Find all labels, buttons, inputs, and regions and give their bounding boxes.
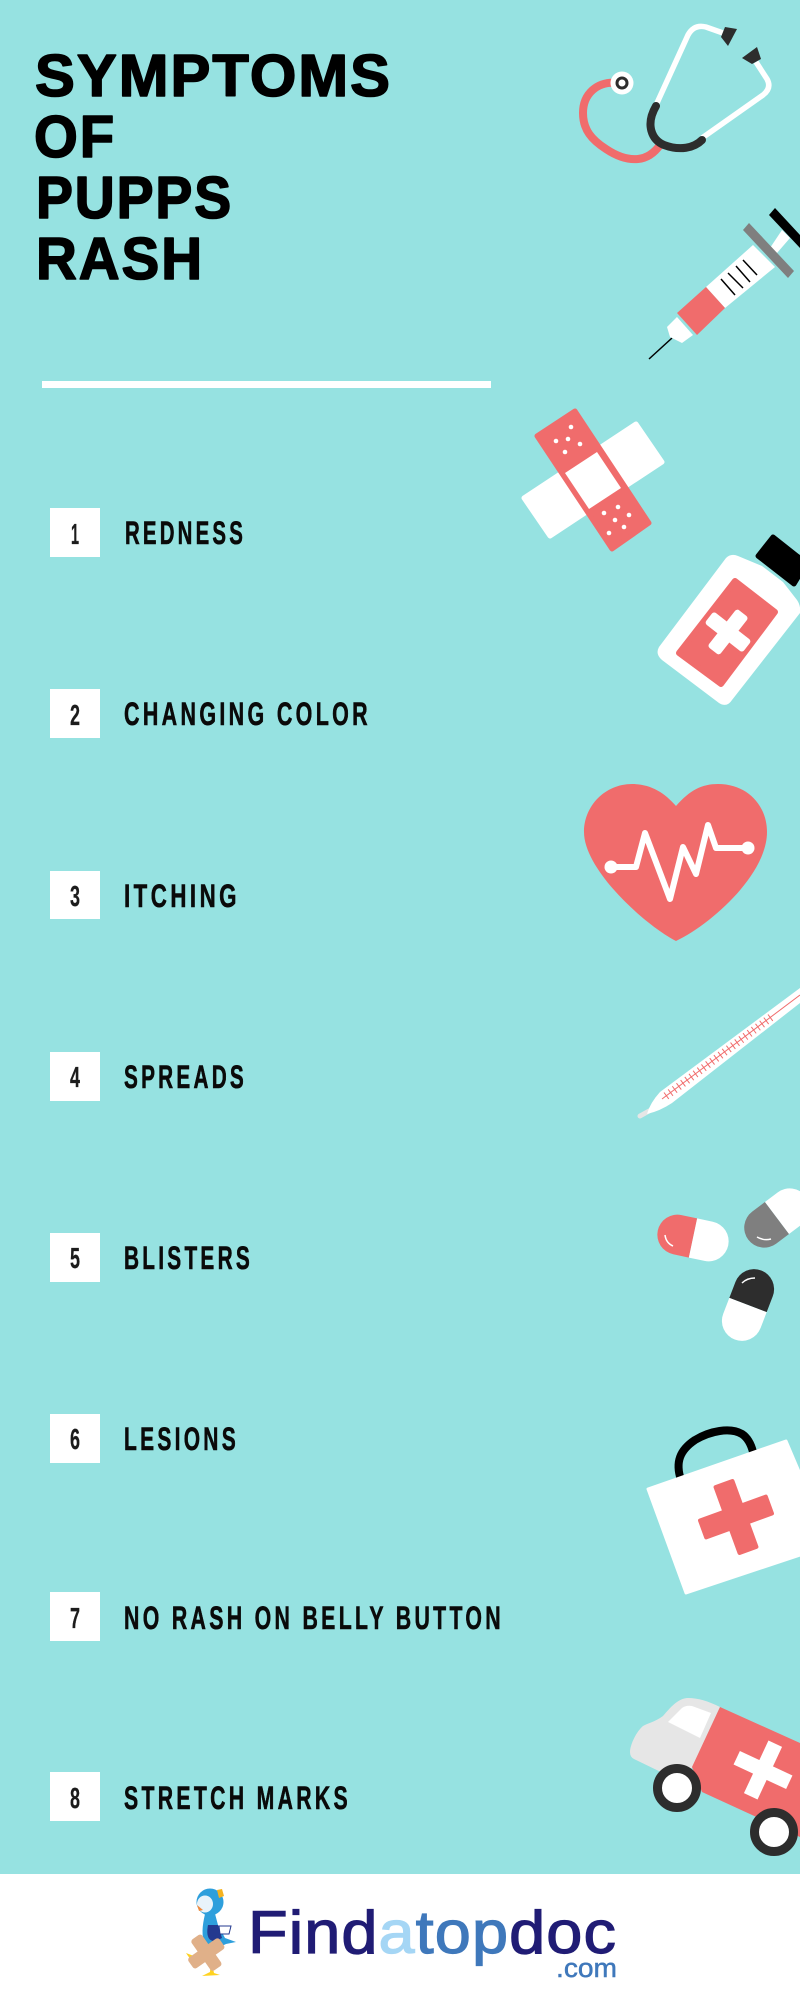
list item 6: lesions xyxy=(50,1414,239,1463)
list item 8: stretch marks: STRETCH MARKS xyxy=(124,1780,351,1816)
icon: pills xyxy=(654,1180,800,1347)
title: SYMPTOMS xyxy=(35,43,392,109)
list item 8: stretch marks: 8 xyxy=(70,1783,80,1815)
list item 7: no rash on belly button: NO RASH ON BELLY BUTTON xyxy=(124,1600,504,1636)
list item 4: spreads xyxy=(50,1052,247,1101)
list item 4: spreads: 4 xyxy=(70,1062,80,1094)
list item 7: no rash on belly button: 7 xyxy=(70,1603,80,1635)
icon: heart with pulse xyxy=(584,784,767,941)
footer band xyxy=(0,1874,800,2000)
list item 5: blisters: 5 xyxy=(70,1243,80,1275)
list item 3: itching xyxy=(50,871,240,919)
title: RASH xyxy=(36,226,204,292)
list item 8: stretch marks xyxy=(50,1772,351,1821)
icon: bandage xyxy=(524,411,662,549)
list item 2: changing color: CHANGING COLOR xyxy=(124,696,371,732)
list item 3: itching: ITCHING xyxy=(124,878,240,914)
logo: Findatopdoc.com wordmark: Findatopdoc xyxy=(248,1899,617,1966)
list item 5: blisters: BLISTERS xyxy=(124,1240,253,1276)
icon: stethoscope xyxy=(583,26,769,159)
title xyxy=(34,43,392,292)
icon: ambulance xyxy=(630,1698,800,1852)
list item 3: itching: 3 xyxy=(70,881,80,913)
logo: duck mascot xyxy=(180,1888,236,1979)
list item 1: redness xyxy=(50,508,246,557)
title: OF xyxy=(34,104,116,170)
list item 5: blisters xyxy=(50,1233,253,1282)
list item 1: redness: 1 xyxy=(71,519,79,551)
list item 2: changing color xyxy=(50,689,371,738)
list item 6: lesions: 6 xyxy=(70,1424,80,1456)
icon: syringe xyxy=(649,208,800,359)
list item 4: spreads: SPREADS xyxy=(124,1059,247,1095)
list item 2: changing color: 2 xyxy=(70,700,80,732)
title: PUPPS xyxy=(36,165,233,231)
logo: Findatopdoc.com wordmark: .com xyxy=(556,1953,617,1983)
list item 7: no rash on belly button xyxy=(50,1592,504,1641)
list item 6: lesions: LESIONS xyxy=(124,1421,239,1457)
icon: thermometer xyxy=(640,988,800,1116)
icon: medicine bottle xyxy=(658,537,800,705)
icon: first aid kit xyxy=(648,1430,800,1593)
list item 1: redness: REDNESS xyxy=(125,515,246,551)
